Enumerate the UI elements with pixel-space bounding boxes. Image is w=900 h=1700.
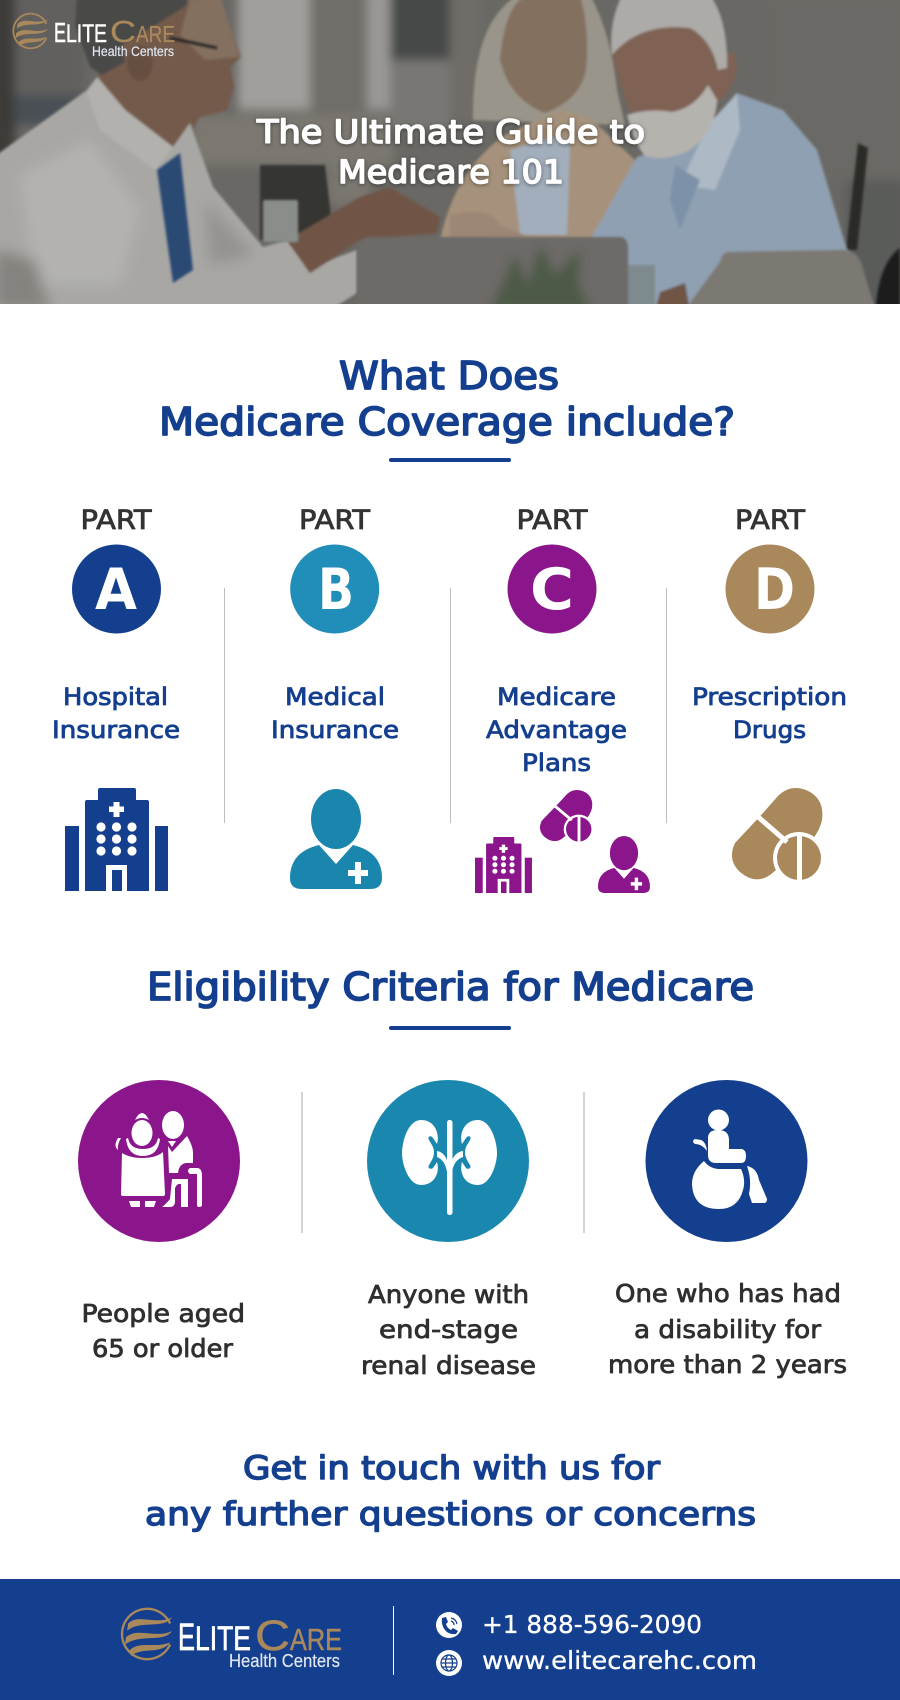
website: www.elitecarehc.com (482, 1646, 757, 1675)
panel: Part C (475, 505, 650, 893)
panel: Part B: PART (299, 505, 371, 536)
call to action: any further questions or concerns (145, 1495, 756, 1533)
icon: doctor (290, 789, 382, 889)
header logo: ARE (136, 21, 175, 47)
caption: renal: renal disease (361, 1351, 536, 1380)
header logo: LITE (66, 20, 107, 48)
call to action: Get in touch with us for (243, 1449, 661, 1487)
hero title: Medicare 101 (338, 153, 564, 191)
panel: age criterion (78, 1080, 245, 1363)
panel: Part B: B (318, 557, 354, 623)
caption: disability (608, 1279, 847, 1379)
footer logo: ARE (290, 1622, 342, 1657)
caption: age: 65 or older (92, 1334, 234, 1363)
caption: disability: more than 2 years (608, 1350, 847, 1379)
call to action (145, 1449, 756, 1533)
heading: coverage: Medicare Coverage include? (159, 400, 735, 444)
icon: phone (436, 1612, 462, 1638)
panel: Part D: Drugs (733, 716, 806, 744)
header logo (13, 14, 175, 59)
panel: Part C: C (530, 557, 574, 623)
icon: wheelchair (692, 1110, 767, 1209)
heading: coverage (159, 354, 735, 462)
panel: renal criterion (361, 1080, 536, 1380)
logo wordmark: E (54, 17, 66, 48)
icon: pills (732, 788, 825, 884)
panel: Part B (271, 505, 399, 889)
caption: disability: One who has had (615, 1279, 841, 1308)
photo: laptop (357, 237, 628, 310)
photo: dark chair behind table (260, 165, 332, 240)
photo: shirt shading (0, 148, 249, 304)
photo: man on right (590, 93, 880, 320)
footer bar (0, 1579, 900, 1700)
header logo: Health Centers (92, 43, 174, 59)
heading: eligibility: Eligibility Criteria for Medicare (147, 965, 754, 1009)
panel: Part A: Insurance (52, 716, 180, 744)
caption: renal (361, 1280, 536, 1380)
panel: Part C: Plans (522, 749, 591, 777)
panel: Part A: PART (80, 505, 152, 536)
footer logo: LITE (195, 1620, 251, 1658)
icon: small doctor (598, 836, 650, 893)
icon: hospital (65, 788, 168, 891)
footer logo: Health Centers (229, 1651, 340, 1671)
caption: disability: a disability for (634, 1315, 822, 1344)
heading: eligibility (147, 965, 754, 1030)
icon: small pill (540, 790, 594, 844)
header logo: C (110, 14, 136, 49)
photo: man on left (98, 0, 241, 150)
caption: age (82, 1299, 245, 1363)
footer logo (122, 1609, 342, 1671)
icon: globe (436, 1650, 462, 1676)
panel: Part B: Medical (285, 683, 385, 711)
panel: Part C: Advantage (486, 716, 627, 744)
panel: Part D: Prescription (692, 683, 847, 711)
photo: chair back right (846, 143, 868, 250)
photo: glass (263, 200, 298, 242)
panel: Part C: PART (516, 505, 588, 536)
icon: kidneys (402, 1120, 497, 1215)
logo emblem (13, 14, 48, 48)
panel: Part D (692, 505, 847, 884)
caption: renal: end-stage (379, 1315, 518, 1344)
panel: Part C: Medicare (497, 683, 616, 711)
footer logo: E (178, 1617, 195, 1659)
photo: second laptop (689, 248, 874, 304)
icon: elderly couple (116, 1111, 202, 1207)
panel: Part A: A (95, 557, 137, 623)
hero title: The Ultimate Guide to (256, 113, 645, 151)
panel: Part D: D (754, 557, 795, 623)
panel: Part A (52, 505, 180, 891)
photo: woman (473, 0, 625, 125)
hero title (256, 113, 645, 191)
panel: Part A: Hospital (63, 683, 168, 711)
photo: plant (490, 248, 590, 304)
panel: Part B: Insurance (271, 716, 399, 744)
heading: coverage: What Does (339, 354, 559, 398)
icon: small hospital (475, 837, 532, 893)
footer logo: C (255, 1612, 290, 1660)
phone number: +1 888-596-2090 (482, 1610, 702, 1639)
hero photo banner (0, 0, 900, 320)
panel: disability criterion (608, 1080, 847, 1379)
panel: Part D: PART (735, 505, 806, 536)
caption: renal: Anyone with (368, 1280, 529, 1309)
caption: age: People aged (82, 1299, 245, 1328)
